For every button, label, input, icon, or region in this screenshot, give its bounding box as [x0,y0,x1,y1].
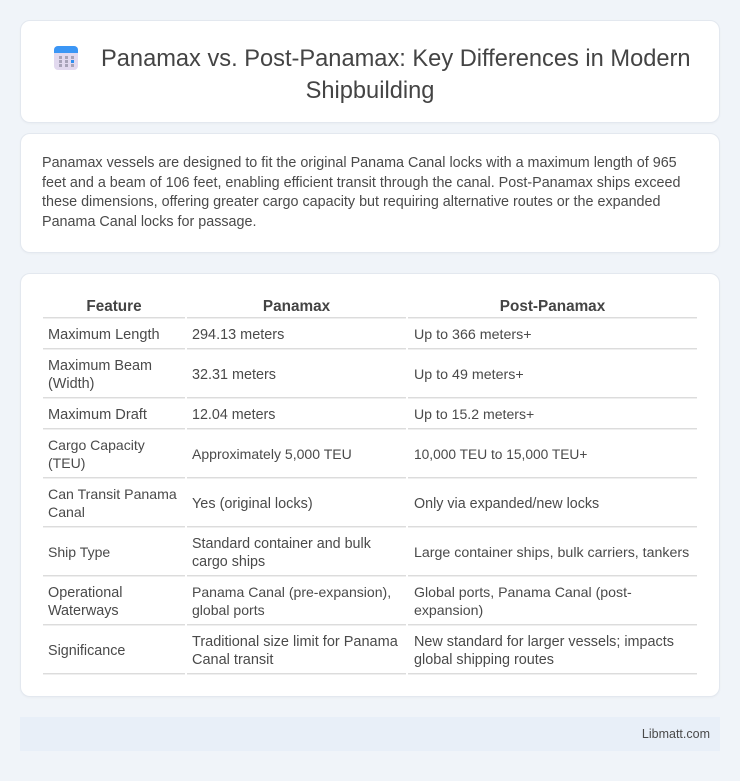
row: cargo capacity: Cargo Capacity [48,437,145,453]
table card [20,273,720,697]
row: ship type: Large container ships, bulk carriers, tankers [414,545,689,561]
row: maximum draft: Up to 15.2 meters+ [414,406,534,422]
row: maximum beam: (Width) [48,376,94,392]
title [101,46,691,104]
row: significance: global shipping routes [414,652,554,668]
row: can transit: Yes (original locks) [192,496,313,512]
row: operational waterways: Global ports, Panama Canal (post- [414,584,632,600]
row: maximum beam: 32.31 meters [192,367,276,383]
footer text: Libmatt.com [642,727,710,741]
row: significance: Significance [48,643,125,659]
row: operational waterways [48,584,632,619]
row: significance: New standard for larger vessels; impacts [414,634,674,650]
intro text [42,155,680,230]
row: maximum draft: 12.04 meters [192,407,275,423]
title card [20,20,720,123]
row: maximum length [48,327,532,343]
row: maximum draft [48,406,534,423]
footer bar [20,717,720,751]
intro text: feet and a beam of 106 feet, enabling efficient transit through the canal. Post-Panamax ships exceed [42,175,680,191]
row: ship type: Ship Type [48,544,110,560]
row: maximum beam: Maximum Beam [48,358,152,374]
row: operational waterways: Waterways [48,603,119,619]
row: ship type: Standard container and bulk [192,536,371,552]
row: can transit: Can Transit Panama [48,486,177,502]
title: Shipbuilding [306,78,434,104]
row: maximum length: Up to 366 meters+ [414,327,532,343]
row: cargo capacity [48,437,587,471]
row: operational waterways: Operational [48,585,122,601]
row: cargo capacity: (TEU) [48,455,85,471]
icon: calendar [54,46,78,70]
row: operational waterways: expansion) [414,602,483,618]
row: maximum length: Maximum Length [48,327,160,343]
row: maximum draft: Maximum Draft [48,407,147,423]
row: significance [48,634,674,668]
title: Panamax vs. Post-Panamax: Key Differences in Modern [101,46,691,72]
row: maximum length: 294.13 meters [192,327,284,343]
row: operational waterways: global ports [192,602,265,618]
row: cargo capacity: 10,000 TEU to 15,000 TEU+ [414,447,587,462]
row: significance: Traditional size limit for Panama [192,634,398,650]
row: can transit [48,486,599,520]
header row: Post-Panamax [500,298,605,315]
row: can transit: Only via expanded/new locks [414,496,599,512]
header row: Panamax [263,298,330,315]
intro text: these dimensions, offering greater cargo capacity but requiring alternative routes or the expanded [42,194,660,210]
row: operational waterways: Panama Canal (pre-expansion), [192,584,391,600]
row: maximum beam: Up to 49 meters+ [414,367,524,383]
intro text: Panamax vessels are designed to fit the original Panama Canal locks with a maximum length of 965 [42,155,677,171]
row: can transit: Canal [48,504,85,520]
header row: Feature [86,298,142,315]
header row [86,298,606,315]
row: ship type [48,536,689,570]
intro text: Panama Canal locks for passage. [42,214,256,230]
intro card [20,133,720,253]
row: cargo capacity: Approximately 5,000 TEU [192,446,352,462]
row: ship type: cargo ships [192,554,265,570]
row: significance: Canal transit [192,652,273,668]
row: maximum beam [48,358,524,392]
